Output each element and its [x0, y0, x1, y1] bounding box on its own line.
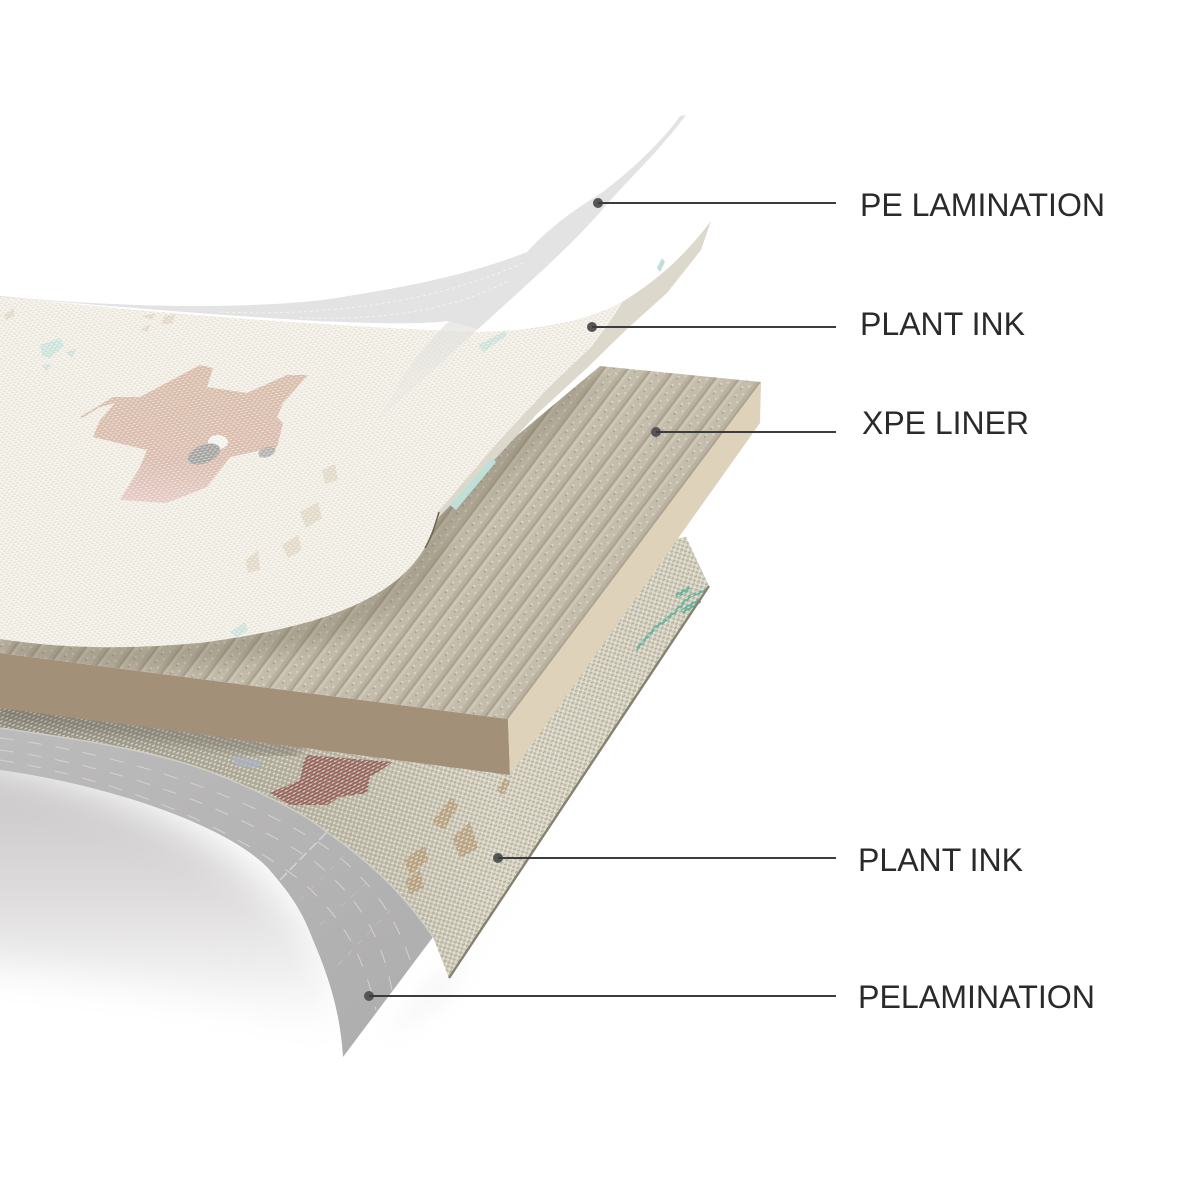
- illustration: pink bear: [80, 365, 308, 503]
- sheet edge green marks: [450, 258, 665, 510]
- sheet curl notch: [425, 512, 439, 548]
- illustration: faint footprint motifs: [4, 308, 338, 573]
- sheet thin side edge: [432, 221, 711, 530]
- print foam shadow: [0, 712, 300, 752]
- callout: PE lamination lower: PELAMINATION: [858, 979, 1095, 1015]
- film stitched lines: [0, 738, 410, 1010]
- illustration: lower green sprig: [636, 588, 706, 650]
- callout: XPE liner: [651, 405, 1029, 441]
- layer: top PE lamination film: [0, 115, 686, 425]
- layer: bottom PE lamination film: [0, 728, 433, 1057]
- layer: lower plant ink sheet: [0, 537, 709, 978]
- sheet weave texture: [0, 296, 622, 647]
- callout: XPE liner: XPE LINER: [862, 405, 1029, 441]
- foam front face: [0, 653, 510, 775]
- illustration: lower bear print: [270, 755, 393, 805]
- foam right side face: [508, 382, 761, 775]
- illustration: lower footprint motifs: [404, 778, 510, 895]
- callout: plant ink upper: [587, 306, 1025, 342]
- callout: PE lamination: PE LAMINATION: [860, 187, 1105, 223]
- callout: PE lamination lower: [364, 979, 1095, 1015]
- film translucent front: [373, 252, 527, 425]
- print outer edge: [449, 586, 709, 978]
- foam shadow beneath sheet: [0, 370, 590, 655]
- illustration: teal sparkle motifs: [40, 331, 507, 638]
- illustration: bear eye: [185, 435, 277, 469]
- foam textured top surface: [0, 366, 761, 719]
- film faded blue motif: [232, 756, 262, 768]
- callout: plant ink upper: PLANT INK: [860, 306, 1025, 342]
- layer: top plant ink sheet: [0, 221, 711, 647]
- print weave texture: [0, 537, 709, 978]
- cast shadow under the mat: [0, 690, 640, 1040]
- film curled strip: [0, 115, 686, 329]
- callout: plant ink lower: PLANT INK: [858, 842, 1023, 878]
- callout: plant ink lower: [493, 842, 1023, 878]
- film mesh lines: [220, 262, 525, 318]
- callout: PE lamination: [593, 187, 1105, 223]
- sheet printed surface: [0, 296, 622, 647]
- layer: XPE foam liner: [0, 366, 761, 775]
